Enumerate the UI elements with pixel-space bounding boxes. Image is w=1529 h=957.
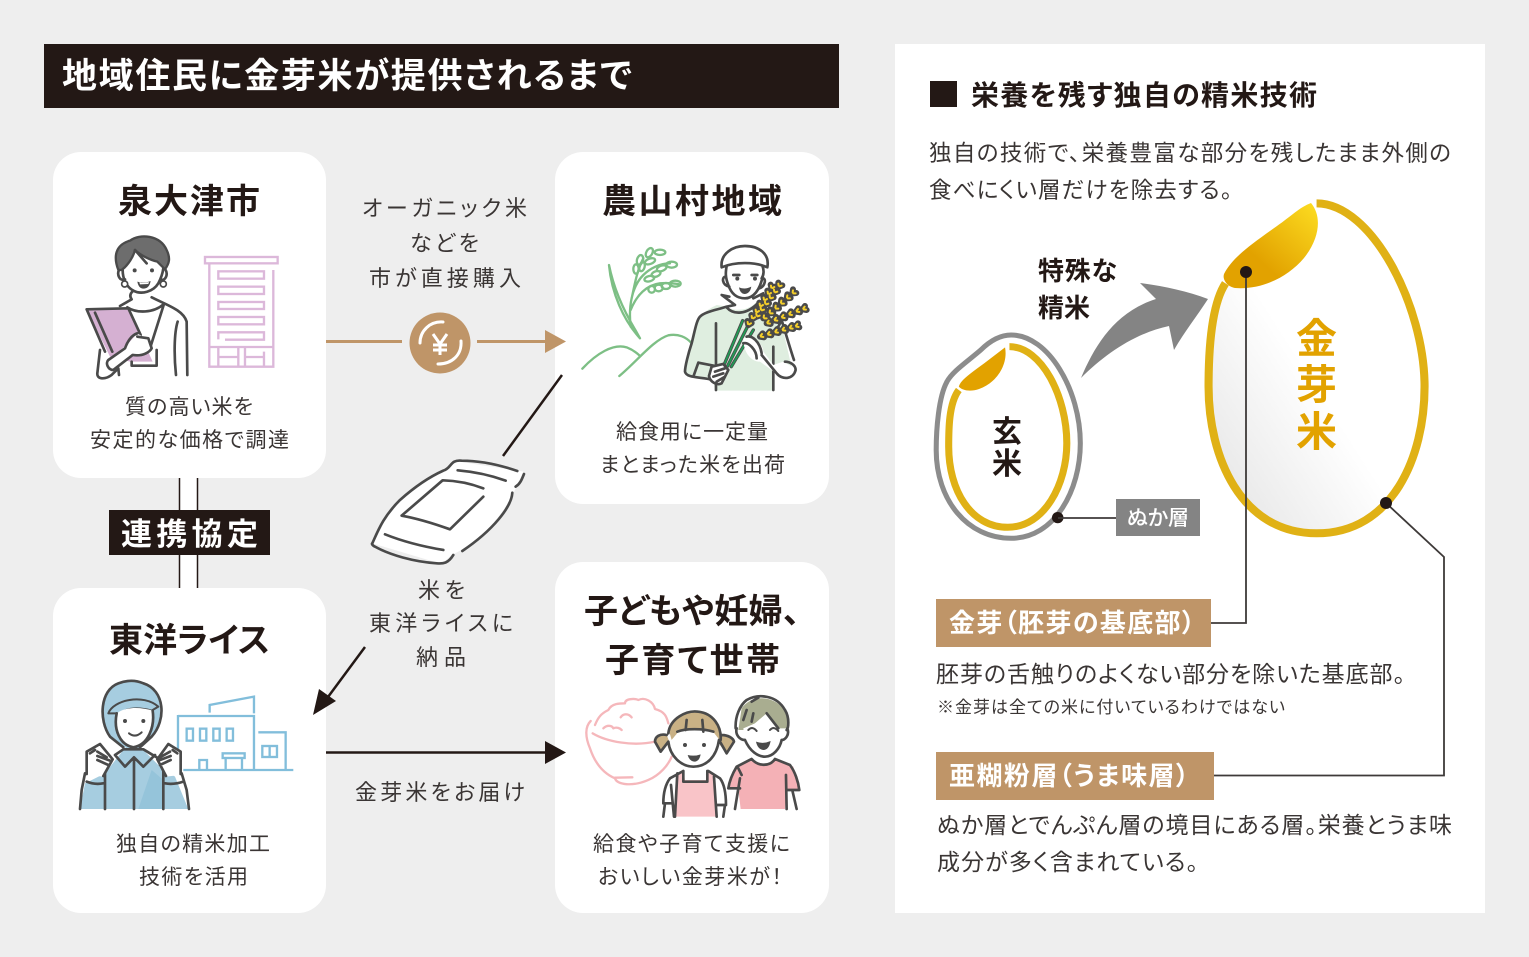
caption: children and families (593, 833, 790, 889)
heading: children and families: 子育て世帯 (605, 642, 780, 680)
heading: farming villages: 農山村地域 (602, 183, 782, 221)
label: bran layer (1116, 499, 1200, 536)
label: brown rice (992, 416, 1022, 481)
icon: factory worker and factory (80, 681, 293, 809)
caption: Izumiotsu (90, 396, 289, 452)
icon: rice plant and farmer (582, 246, 807, 391)
intro text (929, 141, 1451, 203)
label: partnership agreement (109, 510, 270, 555)
icon: yen coin (410, 312, 470, 374)
caption: Toyo Rice: 技術を活用 (139, 866, 248, 889)
leader lines (1058, 272, 1444, 776)
label: special milling: 精米 (1038, 293, 1090, 323)
icon: city staff woman and building (87, 236, 278, 378)
label: kinme rice (1296, 316, 1337, 455)
label: kinme rice: 米 (1296, 409, 1337, 455)
heading: Izumiotsu: 泉大津市 (118, 183, 260, 221)
label: aleurone layer: 亜糊粉層（うま味層） (949, 761, 1189, 791)
label: kinme rice: 芽 (1296, 362, 1337, 408)
label: deliver kinme rice: 金芽米をお届け (355, 780, 525, 805)
diagram: kinme rice grain (1209, 203, 1425, 533)
arrow: deliver kinme rice (326, 741, 566, 764)
panel: milling technology (895, 44, 1485, 913)
text: aleurone description: 成分が多く含まれている。 (937, 849, 1198, 875)
heading: Toyo Rice: 東洋ライス (109, 622, 270, 660)
icon: rice bag (372, 461, 524, 564)
label: special milling: 特殊な (1038, 256, 1117, 286)
dot: aleurone layer (1380, 497, 1392, 509)
intro text: 食べにくい層だけを除去する。 (929, 178, 1232, 203)
label: purchase by city: オーガニック米 (362, 196, 527, 221)
title (44, 44, 839, 108)
label: aleurone layer (936, 752, 1214, 800)
panel: farming villages (555, 152, 829, 504)
diagram: brown rice grain (936, 335, 1080, 538)
caption: Toyo Rice: 独自の精米加工 (116, 833, 270, 856)
caption: children and families: 給食や子育て支援に (593, 833, 790, 856)
intro text: 独自の技術で、栄養豊富な部分を残したまま外側の (929, 141, 1451, 166)
panel: children and families (555, 562, 829, 913)
heading: children and families: 子どもや妊婦、 (584, 593, 800, 631)
label: brown rice: 玄 (992, 416, 1022, 449)
dot: bran layer (1052, 512, 1063, 523)
icon: rice bowl and children (586, 696, 799, 817)
arrow: special milling (1081, 283, 1208, 378)
text: aleurone description (937, 812, 1452, 875)
heading: children and families (584, 593, 800, 680)
caption: farming villages: 給食用に一定量 (616, 421, 768, 444)
label: brown rice: 米 (992, 448, 1022, 481)
label: delivery to Toyo Rice: 納品 (416, 645, 466, 670)
caption: Toyo Rice (116, 833, 270, 889)
label: purchase by city: などを (410, 231, 479, 256)
caption: farming villages: まとまった米を出荷 (600, 454, 785, 477)
label: bran layer: ぬか層 (1127, 507, 1189, 530)
label: kinme rice: 金 (1296, 316, 1337, 362)
label: purchase by city (362, 196, 527, 291)
dot: germ (1240, 266, 1252, 278)
label: partnership agreement: 連携協定 (121, 517, 258, 552)
text: germ description (936, 661, 1405, 717)
caption: Izumiotsu: 質の高い米を (125, 396, 253, 419)
connector: partnership lines (179, 476, 198, 590)
label: delivery to Toyo Rice (369, 578, 513, 670)
text: germ description: 胚芽の舌触りのよくない部分を除いた基底部。 (936, 661, 1405, 687)
heading: milling technology: 栄養を残す独自の精米技術 (971, 80, 1317, 111)
caption: children and families: おいしい金芽米が！ (598, 866, 782, 889)
label: delivery to Toyo Rice: 東洋ライスに (369, 611, 513, 636)
arrow: city purchases rice with money (326, 312, 566, 374)
caption: farming villages (600, 421, 785, 477)
label: special milling (1038, 256, 1117, 323)
panel: Toyo Rice (53, 588, 326, 913)
label: purchase by city: 市が直接購入 (369, 266, 521, 291)
text: aleurone description: ぬか層とでんぷん層の境目にある層。栄養とうま味 (937, 812, 1452, 838)
arrow: rice shipped to Toyo Rice (313, 375, 562, 715)
label: kinme germ (936, 599, 1211, 647)
panel: Izumiotsu city (53, 152, 326, 478)
label: delivery to Toyo Rice: 米を (418, 578, 465, 603)
caption: Izumiotsu: 安定的な価格で調達 (90, 429, 289, 452)
text: germ description: ※金芽は全ての米に付いているわけではない (937, 698, 1285, 717)
title: 地域住民に金芽米が提供されるまで (62, 57, 632, 96)
label: kinme germ: 金芽（胚芽の基底部） (949, 608, 1195, 638)
